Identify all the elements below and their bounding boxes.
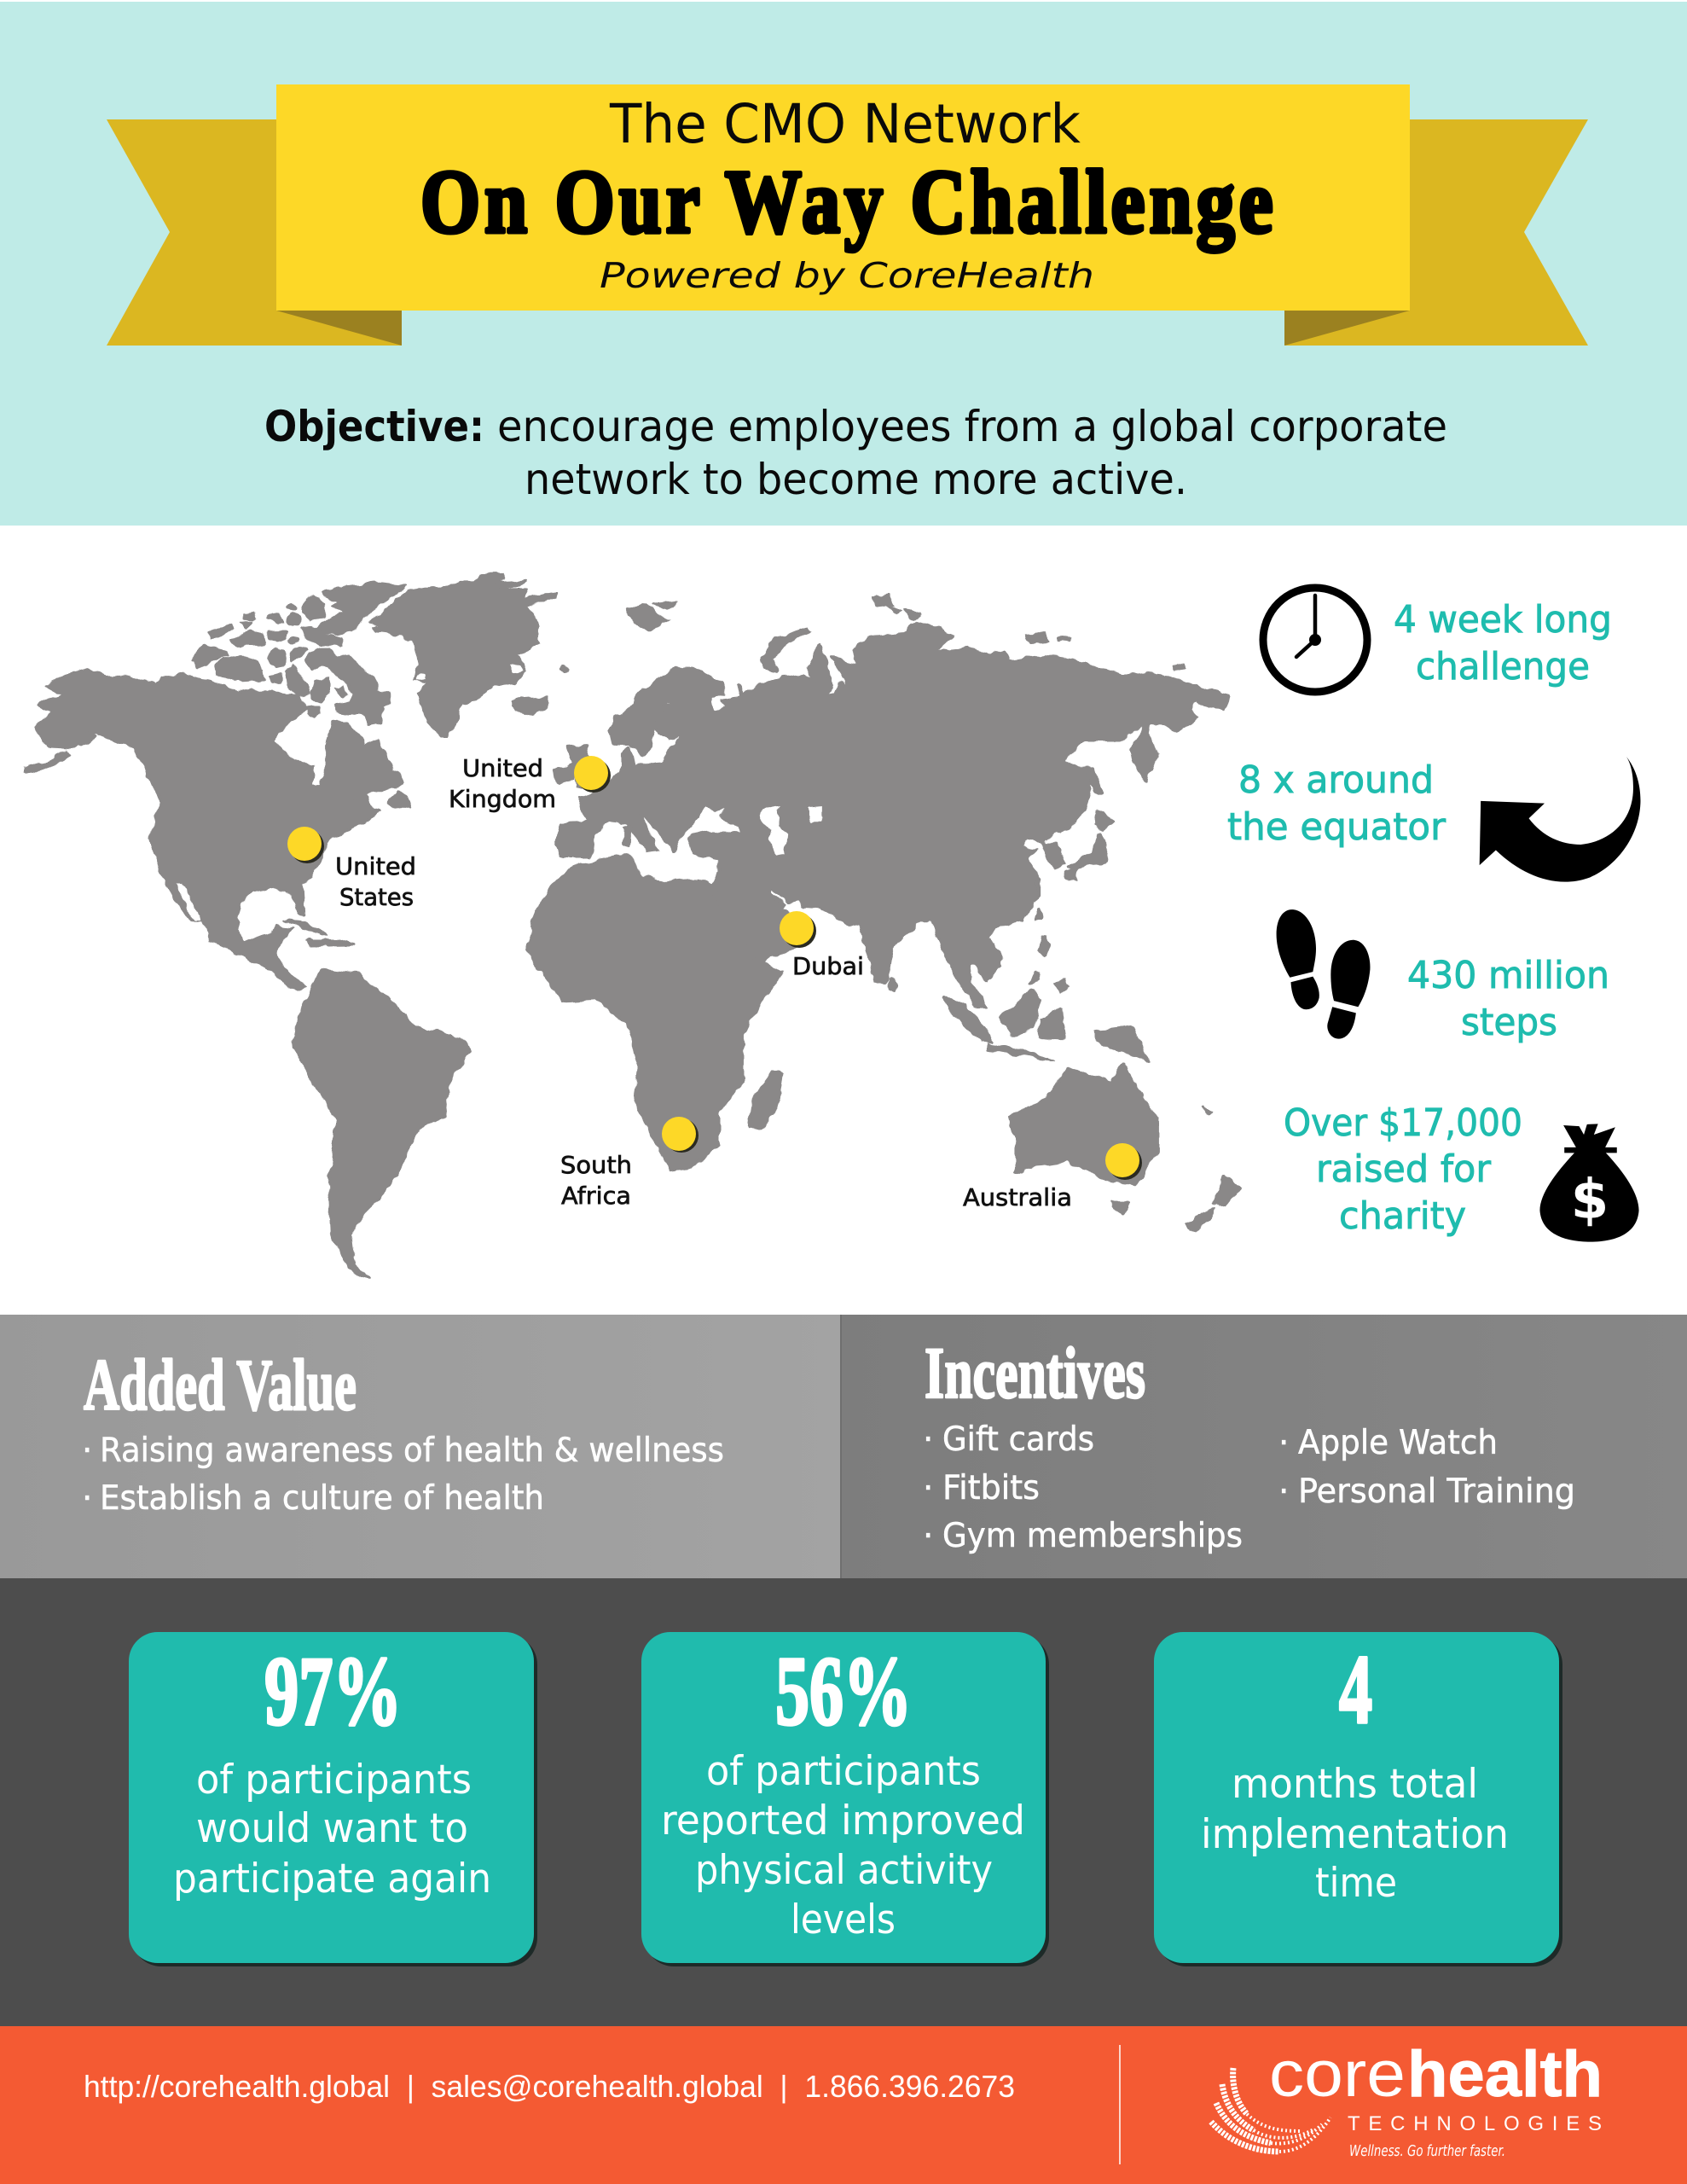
map label: United States: United — [335, 852, 416, 880]
incentives list: Gym memberships — [942, 1517, 1243, 1555]
icon: footprints — [1277, 909, 1370, 1039]
panel: header background — [0, 2, 1687, 526]
icon: clock — [1263, 588, 1367, 692]
stat: 8 x around the equator — [1227, 758, 1446, 849]
objective statement: encourage employees from a global corporate — [497, 402, 1447, 451]
objective statement: network to become more active. — [525, 455, 1187, 504]
card: 56%: of participants — [706, 1748, 981, 1795]
stat: 4 week long challenge: 4 week long — [1394, 598, 1612, 642]
card: 97%: of participants — [196, 1757, 472, 1804]
map label: South Africa: Africa — [561, 1182, 631, 1210]
stat: 4 week long challenge: challenge — [1416, 645, 1590, 688]
card: 4 months: 4 — [1339, 1635, 1372, 1744]
incentives list — [923, 1420, 1575, 1555]
incentives list: Gift cards — [942, 1420, 1094, 1459]
stat: 430 million steps: 430 million — [1407, 954, 1609, 997]
contact details: http://corehealth.global | sales@corehealth.global | 1.866.396.2673 — [84, 2069, 1015, 2104]
map label: United Kingdom — [449, 754, 556, 813]
panel: footer — [0, 2026, 1687, 2184]
map label: United Kingdom: United — [462, 754, 543, 782]
panel: incentives — [840, 1315, 1687, 1578]
subtitle: Powered by CoreHealth: Powered by CoreHealth — [600, 255, 1094, 296]
added value list: Establish a culture of health — [100, 1479, 544, 1518]
heading: Added Value: Added Value — [84, 1344, 357, 1426]
logo: corehealth technologies: core — [1269, 2038, 1406, 2111]
map label: South Africa: South — [560, 1151, 632, 1179]
logo: corehealth technologies: health — [1407, 2038, 1603, 2111]
card: 56%: physical activity — [695, 1847, 993, 1894]
icon: money bag — [1539, 1124, 1639, 1242]
stat: 8 x around the equator: 8 x around — [1238, 758, 1434, 802]
panel: results background — [0, 1578, 1687, 2026]
card: 97% — [129, 1632, 537, 1966]
incentives list: Apple Watch — [1298, 1424, 1498, 1462]
stat: 8 x around the equator: the equator — [1227, 805, 1446, 849]
card: 56%: levels — [791, 1896, 896, 1943]
incentives list: · — [1278, 1424, 1289, 1462]
incentives list: · — [923, 1469, 933, 1507]
panel: added value — [0, 1315, 841, 1578]
card: 4 months: months total — [1232, 1761, 1478, 1808]
incentives list: Fitbits — [942, 1469, 1040, 1507]
map label: Dubai: Dubai — [792, 952, 864, 980]
title: The CMO Network: The CMO Network — [609, 93, 1081, 155]
card: 4 months: time — [1315, 1860, 1397, 1907]
card: 97%: 97% — [264, 1637, 402, 1745]
logo: corehealth technologies — [1211, 2038, 1603, 2160]
logo swoosh — [1211, 2068, 1330, 2152]
stat: 4 week long challenge — [1394, 598, 1612, 688]
incentives list: · — [1278, 1472, 1289, 1511]
logo: corehealth technologies: Wellness. Go further faster. — [1349, 2142, 1505, 2160]
card: 56% — [641, 1632, 1049, 1966]
stat: Over $17,000 raised for charity — [1284, 1101, 1522, 1238]
stat: Over $17,000 raised for charity: raised for — [1316, 1147, 1492, 1191]
added value list: · — [82, 1479, 92, 1518]
card: 56%: reported improved — [661, 1798, 1025, 1844]
added value list: · — [82, 1432, 92, 1470]
stat: 430 million steps — [1407, 954, 1609, 1044]
added value list — [82, 1432, 724, 1518]
card: 4 months — [1154, 1632, 1562, 1966]
title: On Our Way Challenge: On Our Way Challenge — [420, 152, 1273, 253]
stat: 430 million steps: steps — [1461, 1001, 1557, 1044]
incentives list: Personal Training — [1298, 1472, 1575, 1511]
map label: Australia: Australia — [963, 1183, 1072, 1211]
icon: money bag: $ — [1571, 1169, 1609, 1232]
map markers — [287, 756, 1142, 1180]
banner ribbon — [107, 84, 1588, 346]
added value list: Raising awareness of health & wellness — [100, 1432, 724, 1470]
heading: Incentives: Incentives — [925, 1332, 1145, 1414]
stat: Over $17,000 raised for charity: charity — [1339, 1194, 1466, 1238]
card: 56%: 56% — [775, 1637, 912, 1745]
card: 4 months: implementation — [1201, 1811, 1509, 1858]
stat: Over $17,000 raised for charity: Over $17,000 — [1284, 1101, 1522, 1145]
icon: curved arrow — [1480, 757, 1640, 882]
card: 97%: would want to — [196, 1805, 468, 1852]
incentives list: · — [923, 1420, 933, 1459]
incentives list: · — [923, 1517, 933, 1555]
card: 97%: participate again — [173, 1856, 491, 1902]
logo: corehealth technologies: TECHNOLOGIES — [1348, 2112, 1602, 2135]
map label: United States: States — [339, 883, 414, 911]
objective statement: Objective: — [264, 402, 484, 451]
map label: United Kingdom: Kingdom — [449, 785, 556, 813]
map label: United States — [335, 852, 416, 911]
world map — [26, 574, 1239, 1278]
objective statement — [264, 402, 1447, 504]
map label: South Africa — [560, 1151, 632, 1210]
